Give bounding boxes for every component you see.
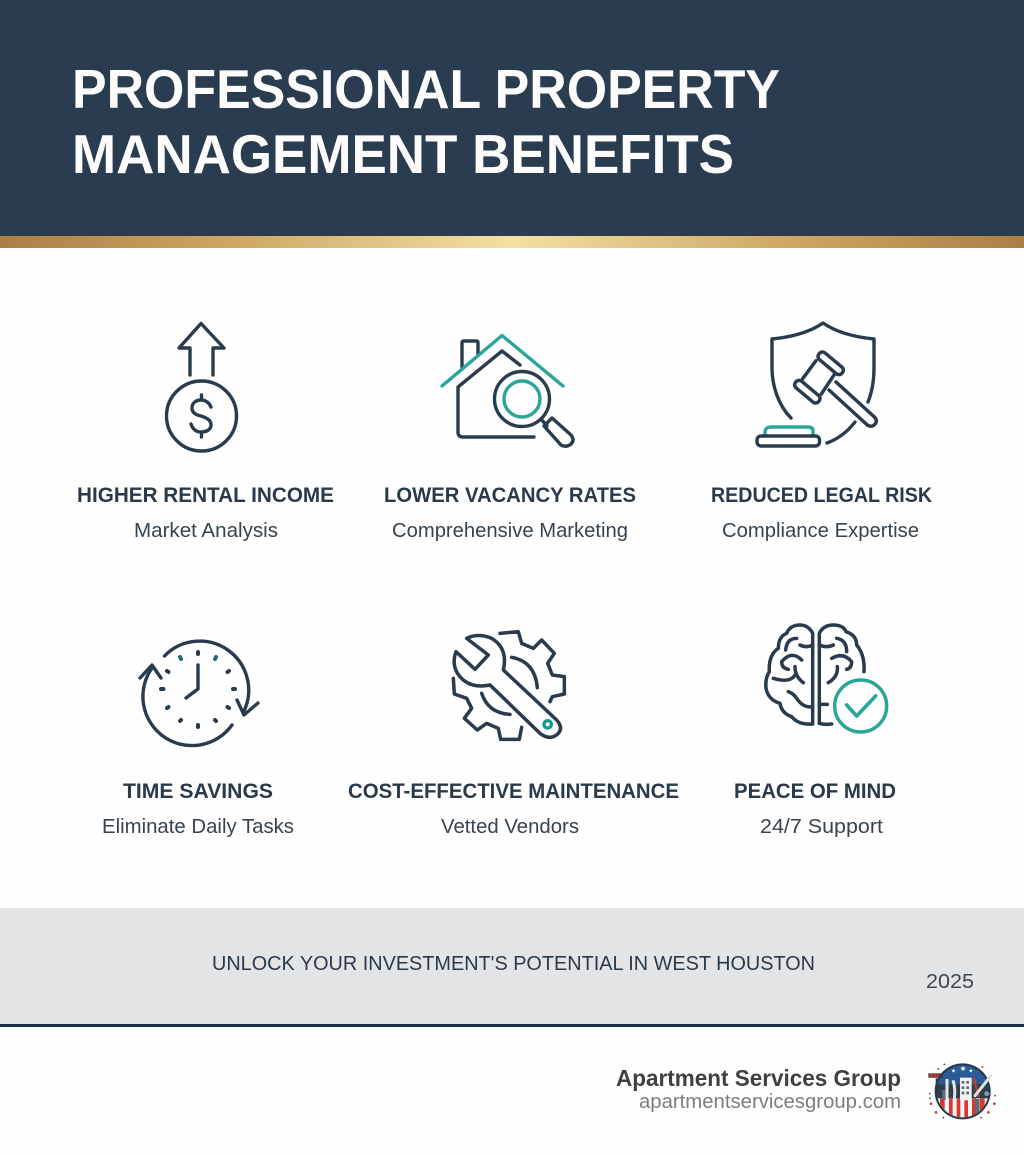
label: HIGHER RENTAL INCOME bbox=[77, 484, 334, 507]
title bbox=[72, 58, 780, 185]
benefit: peace of mind bbox=[734, 625, 896, 838]
sublabel: Comprehensive Marketing bbox=[392, 520, 628, 542]
icon: wrench and gear bbox=[453, 632, 564, 739]
icon: brain with check mark bbox=[766, 625, 887, 732]
footer company name and url: apartmentservicesgroup.com bbox=[639, 1091, 901, 1113]
benefit: higher rental income bbox=[77, 324, 334, 542]
label: LOWER VACANCY RATES bbox=[384, 484, 636, 507]
gold divider bar bbox=[0, 236, 1024, 248]
tagline: UNLOCK YOUR INVESTMENT'S POTENTIAL IN WEST HOUSTON bbox=[212, 953, 815, 975]
icon: clock with circular arrows bbox=[140, 641, 258, 746]
title: PROFESSIONAL PROPERTY bbox=[72, 58, 780, 120]
sublabel: Eliminate Daily Tasks bbox=[102, 816, 294, 838]
label: COST-EFFECTIVE MAINTENANCE bbox=[348, 780, 679, 803]
sublabel: Market Analysis bbox=[134, 520, 278, 542]
label: REDUCED LEGAL RISK bbox=[711, 484, 932, 507]
header banner bbox=[0, 0, 1024, 236]
icon: arrow up and dollar coin bbox=[166, 324, 236, 451]
footer company name and url bbox=[616, 1065, 901, 1113]
year: 2025 bbox=[926, 971, 974, 993]
sublabel: 24/7 Support bbox=[760, 816, 883, 838]
title: MANAGEMENT BENEFITS bbox=[72, 123, 734, 185]
footer company name and url: Apartment Services Group bbox=[616, 1065, 901, 1091]
logo badge bbox=[928, 1063, 996, 1122]
benefit: cost-effective maintenance bbox=[348, 632, 679, 838]
benefit: lower vacancy rates bbox=[384, 336, 636, 542]
logo badge: ★ bbox=[951, 1067, 956, 1074]
label: PEACE OF MIND bbox=[734, 780, 896, 803]
benefit: time savings bbox=[102, 641, 294, 838]
label: TIME SAVINGS bbox=[123, 780, 273, 803]
logo badge: ★ bbox=[960, 1064, 966, 1073]
sublabel: Vetted Vendors bbox=[441, 816, 579, 838]
sublabel: Compliance Expertise bbox=[722, 520, 919, 542]
bottom band bbox=[0, 908, 1024, 1027]
icon: shield with gavel bbox=[757, 323, 876, 446]
icon: house with magnifying glass bbox=[442, 336, 573, 446]
benefit: reduced legal risk bbox=[711, 323, 932, 542]
logo badge: ★ bbox=[968, 1067, 973, 1074]
